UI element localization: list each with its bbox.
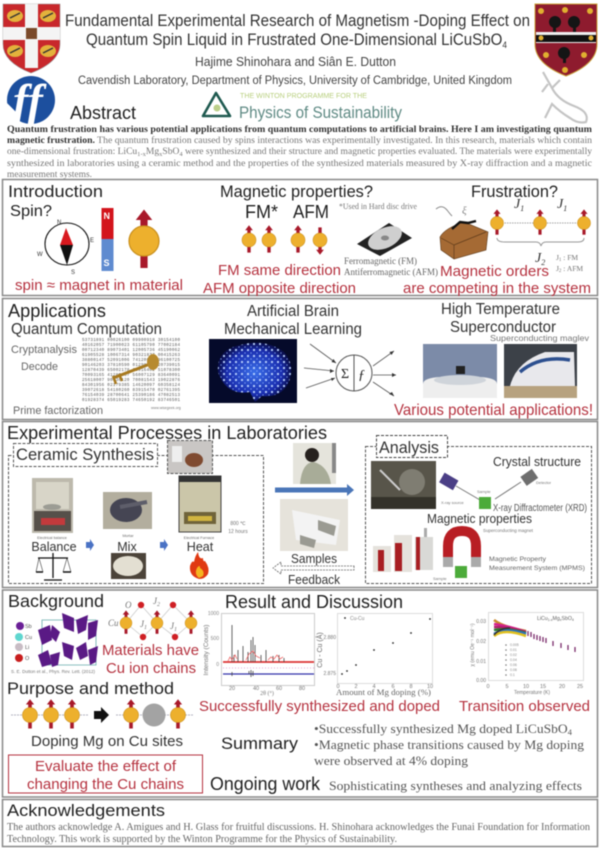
heading: experimental processes: Experimental Processes in Laboratories <box>7 423 327 443</box>
heading: background: Background <box>8 591 104 611</box>
panel: acknowledgements <box>2 800 598 846</box>
note: hard disc: *Used in Hard disc drive <box>339 202 417 211</box>
chart: susceptibility: 0.02 <box>510 653 517 657</box>
icon: frustrated chain: : AFM <box>561 264 583 273</box>
acknowledgements text: Technology. This work is supported by the Winton Programme for the Physics of Sustainability. <box>7 834 397 845</box>
label: maglev: Superconducting maglev <box>490 333 590 343</box>
chart: XRD pattern: 500 <box>211 636 219 642</box>
diagram: Cu chain: J <box>140 619 144 629</box>
label: ceramic synthesis: Ceramic Synthesis <box>16 446 154 464</box>
chart: XRD pattern: 40 <box>253 686 259 692</box>
label: prime factorization: Prime factorization <box>13 405 103 417</box>
image: researcher <box>293 443 336 484</box>
chart: Cu-Cu distance: 8 <box>409 684 413 690</box>
diagram: Cu chain <box>108 596 197 640</box>
label: MPMS: Magnetic Property <box>489 556 547 563</box>
label: AFM: AFM <box>293 202 329 222</box>
image: lab glassware <box>168 440 212 474</box>
legend: FM and AFM: Ferromagnetic (FM) <box>344 256 417 267</box>
abstract text: one-dimensional frustration: LiCu <box>7 147 137 157</box>
heading: summary: Summary <box>221 734 299 753</box>
image: MPMS machine <box>373 528 433 572</box>
chart: susceptibility: 10 <box>523 684 529 690</box>
heading: acknowledgements: Acknowledgements <box>7 801 165 820</box>
note: furnace conditions: 12 hours <box>228 529 248 535</box>
image: number grid with key: www.wisegeek.org <box>151 406 181 410</box>
icon: frustrated chain: J <box>556 264 559 273</box>
label: samples: Samples <box>291 552 337 566</box>
icon: frustrated chain: 1 <box>559 258 562 263</box>
chart: Cu-Cu distance: 6 <box>391 684 395 690</box>
chart: susceptibility: Temperature (K) <box>514 690 550 696</box>
chart: Cu-Cu distance: 2 <box>354 684 358 690</box>
chart: Cu-Cu distance: Cu - Cu (Å) <box>315 632 324 668</box>
caption: AFM: AFM opposite direction <box>203 281 356 297</box>
icon: frustrated chain: J <box>535 251 541 266</box>
diagram: Cu chain: J <box>153 596 157 606</box>
abstract text: were synthesized and their structure and magnetic properties evaluated. The materials were experimentally <box>183 147 592 157</box>
chart: susceptibility: x <box>560 618 562 622</box>
image: number grid with key: 40162057 71900023 61105790 77002184 <box>82 344 180 348</box>
caption: magnetic orders: Magnetic orders <box>440 264 549 280</box>
heading: ongoing work: Ongoing work <box>210 773 321 794</box>
icon: scales <box>36 553 71 580</box>
icon: horseshoe magnet: Sample <box>433 576 447 581</box>
callout: evaluate: Evaluate the effect of <box>35 759 177 775</box>
chart: susceptibility: 0.005 <box>510 643 519 647</box>
image: samples <box>280 499 348 551</box>
icon: horseshoe magnet <box>433 528 534 581</box>
heading: mechanical learning: Mechanical Learning <box>224 321 362 338</box>
chart: susceptibility: Mg <box>553 616 560 622</box>
image: number grid with key <box>82 339 181 410</box>
chart: susceptibility: 0.03 <box>476 619 486 625</box>
abstract text: synthesized in laboratories using a ceramic method and the properties of the synthesized materials measured by X-ray diffraction and a magnetic <box>7 158 592 169</box>
affiliation: Cavendish Laboratory, Department of Physics, University of Cambridge, United Kingdom <box>78 75 512 87</box>
chart: susceptibility: 1-x <box>548 618 553 622</box>
chart: susceptibility: 0.08 <box>510 668 517 672</box>
chart: susceptibility: 25 <box>577 684 583 690</box>
image: mixed powder <box>111 553 146 579</box>
chart: susceptibility: 4 <box>572 618 574 622</box>
image: number grid with key: 39072618 54180260 83915470 02761395 <box>82 389 180 393</box>
icon: FM spins <box>242 225 276 253</box>
chart: susceptibility: χ (emu Oe⁻¹ mol⁻¹) <box>470 623 476 667</box>
caption: Cu ion chains: Cu ion chains <box>106 660 196 677</box>
icon: frustrated chain: J <box>514 197 520 212</box>
subheading: quantum computation: Quantum Computation <box>11 321 162 338</box>
diagram: Cu chain: 1 <box>144 625 147 631</box>
heading: result and discussion: Result and Discussion <box>225 592 403 612</box>
chart: susceptibility: 0.06 <box>510 663 517 667</box>
citation: S. E. Dutton et al., Phys. Rev. Lett. (2012) <box>11 669 95 674</box>
logo: Winton programme <box>203 93 402 122</box>
image: neural brain <box>209 339 297 403</box>
panel: experimental processes <box>2 422 598 588</box>
label: MPMS <box>489 556 585 572</box>
chart: Cu-Cu distance: 2.875 <box>323 671 336 677</box>
diagram: neuron: ƒ <box>358 368 365 383</box>
arrow: balance to mix <box>86 539 94 551</box>
icon: AFM spins <box>291 225 327 255</box>
arrow: feedback <box>273 562 354 574</box>
abstract text <box>7 125 592 180</box>
summary text: •Successfully synthesized Mg doped LiCuSbO <box>314 722 548 736</box>
chart: XRD pattern: 0 <box>216 662 219 668</box>
icon: desk with cat: ξ <box>462 205 467 217</box>
heading: superconductor: Superconductor <box>450 319 556 336</box>
icon: frustrated chain: 1 <box>563 204 567 213</box>
icon: frustrated chain: 2 <box>541 258 545 267</box>
chart: susceptibility: 0.02 <box>476 639 486 645</box>
note: furnace conditions <box>228 521 248 535</box>
abstract text: 1-x <box>137 151 147 158</box>
title: Fundamental Experimental Research of Magnetism -Doping Effect on <box>65 12 530 30</box>
label: decode: Decode <box>21 361 58 373</box>
legend: atoms: Cu <box>25 635 32 641</box>
chart: susceptibility <box>470 612 584 696</box>
legend: atoms: Li <box>25 645 29 651</box>
icon: frustrated chain: 1 <box>520 204 524 213</box>
callout: evaluate: changing the Cu chains <box>27 777 184 793</box>
caption: transition observed: Transition observed <box>459 699 590 715</box>
label: cryptanalysis: Cryptanalysis <box>11 344 77 356</box>
icon: frustrated chain: J <box>556 253 559 262</box>
icon: compass: E <box>90 238 94 244</box>
chart: susceptibility: 0.00 <box>476 678 486 684</box>
heading: crystal structure: Crystal structure <box>493 455 581 469</box>
diagram: neuron: Σ <box>341 367 349 382</box>
abstract text: measurement systems. <box>7 170 92 180</box>
icon: compass: N <box>57 220 61 226</box>
summary text: were observed at 4% doping <box>314 754 469 768</box>
abstract text: SbO <box>162 147 179 157</box>
caption: materials have: Materials have <box>102 642 199 659</box>
icon: horseshoe magnet: Superconducting magnet <box>483 528 534 533</box>
icon: compass: S <box>71 270 75 276</box>
title: 4 <box>502 40 507 50</box>
caption: spin magnet: spin ≈ magnet in material <box>15 277 183 294</box>
chart: XRD pattern: Intensity (Counts) <box>203 625 210 675</box>
chart: susceptibility: 5 <box>505 684 509 690</box>
diagram: Cu chain: O <box>125 600 132 610</box>
summary text <box>314 722 585 768</box>
chart: Cu-Cu distance: 10 <box>427 684 433 690</box>
logo: Cambridge shield <box>3 4 60 73</box>
chart: Cu-Cu distance: Cu-Cu <box>350 616 365 622</box>
subheading: spin: Spin? <box>10 203 52 220</box>
icon: compass: W <box>37 252 43 258</box>
arrow: mix to heat <box>160 539 168 551</box>
label: FM: FM* <box>245 202 278 222</box>
legend: FM and AFM <box>344 256 438 278</box>
diagram: Cu chain: J <box>170 621 174 631</box>
chart: XRD pattern: 2θ (°) <box>260 690 274 697</box>
image: number grid with key: 25618007 90436120 70081543 19022876 <box>82 379 180 383</box>
image: number grid with key: 53731891 00026100 09900918 30154100 <box>82 339 180 343</box>
title <box>65 12 530 50</box>
icon: frustrated chain: : FM <box>561 253 578 262</box>
group: ceramic synthesis <box>8 440 264 584</box>
legend: atoms: Sb <box>25 624 32 630</box>
image: number grid with key: 00712340 89073401 12005736 45190062 <box>82 349 180 353</box>
heading: applications: Applications <box>8 300 106 321</box>
labels: equipment names: Electrical Furnace <box>184 536 214 540</box>
image: electrical balance <box>32 478 73 533</box>
abstract text: Quantum frustration has various potential applications from quantum computations to artificial brains. Here I am investigating quantum <box>7 125 592 135</box>
abstract text: 4 <box>179 151 183 158</box>
heading: purpose and method: Purpose and method <box>7 679 174 698</box>
legend: atoms <box>15 622 32 662</box>
logo: lizard <box>542 72 587 122</box>
abstract text: Mg <box>146 147 159 157</box>
chart: susceptibility: 0.04 <box>510 658 517 662</box>
chart: susceptibility: 20 <box>559 684 565 690</box>
chart: Cu-Cu distance <box>315 614 433 697</box>
heading: magnetic properties: Magnetic properties <box>427 511 532 526</box>
chart: XRD pattern <box>203 611 314 697</box>
image: levitating magnet <box>423 344 497 398</box>
logo: ff <box>7 75 55 126</box>
label: mix: Mix <box>117 540 137 554</box>
image: number grid with key: 84301956 02179385 14620097 60358124 <box>82 384 180 388</box>
caption: competing: are competing in the system <box>403 281 591 297</box>
labels: equipment names <box>37 534 214 540</box>
legend: atoms: O <box>25 656 30 662</box>
chart: XRD pattern: 60 <box>276 686 282 692</box>
heading: frustration: Frustration? <box>471 182 558 201</box>
abstract text: magnetic frustration. The quantum frustration caused by spins interactions was experimentally investigated. In this research, materials which contain <box>7 135 592 146</box>
chart: susceptibility: 0 <box>486 684 490 690</box>
image: number grid with key: 61905528 10067314 90321877 00415263 <box>82 354 180 358</box>
logo: ff: ff <box>13 75 47 126</box>
label: heat: Heat <box>187 540 214 554</box>
heading: magnetic properties: Magnetic properties? <box>220 182 373 201</box>
chart: susceptibility: 0.1 <box>510 673 515 677</box>
diagram: XRD: Detector <box>536 480 552 485</box>
icon: bar magnet: S <box>104 258 110 268</box>
callout: evaluate <box>8 755 202 793</box>
labels: equipment names: Electrical balance <box>37 536 67 540</box>
image: number grid with key: 12870439 65002178 38916402 51078300 <box>82 369 180 373</box>
caption: FM: FM same direction <box>218 263 341 279</box>
summary text: •Magnetic phase transitions caused by Mg doping <box>314 738 585 752</box>
diagram: XRD: Sample <box>477 489 491 494</box>
abstract text: x <box>159 151 163 158</box>
label: MPMS: Measurement System (MPMS) <box>489 565 585 572</box>
icon: flame <box>190 552 209 579</box>
note: furnace conditions: 800 ℃ <box>230 521 246 527</box>
chart: susceptibility: SbO <box>562 616 572 622</box>
panel: results <box>2 590 598 797</box>
image: diffractometer <box>371 461 436 509</box>
diagram: Cu chain: Cu <box>108 618 119 628</box>
icon: frustrated chain <box>490 197 590 274</box>
image: number grid with key: 76154039 28700641 25390186 47082513 <box>82 394 180 398</box>
logo: college shield <box>535 4 597 76</box>
chart: susceptibility: LiCu <box>537 616 548 622</box>
icon: frustrated chain: 2 <box>559 269 562 274</box>
image: number grid with key: 01928374 65019283 74650192 83746501 <box>82 399 180 403</box>
image: number grid with key: 38800147 52091006 74120038 96100725 <box>82 359 180 363</box>
caption: synthesized and doped: Successfully synthesized and doped <box>199 699 440 715</box>
ongoing work text: Sophisticating syntheses and analyzing effects <box>329 779 582 793</box>
label: balance: Balance <box>31 540 77 554</box>
diagram: Cu chain: 1 <box>174 627 177 633</box>
label: feedback: Feedback <box>288 573 341 587</box>
image: electrical furnace <box>179 476 221 532</box>
logo: Winton programme: Physics of Sustainability <box>239 103 402 122</box>
icon: frustrated chain: J <box>557 197 563 212</box>
acknowledgements text: The authors acknowledge A. Amigues and H. Glass for fruitful discussions. H. Shinohara acknowledges the Funai Foundation for Information <box>7 822 590 833</box>
diagram: crystal structure <box>38 613 98 667</box>
abstract heading: Abstract <box>70 103 136 123</box>
icon: desk with cat <box>436 205 488 259</box>
chart: XRD pattern: 20 <box>229 686 235 692</box>
title: Quantum Spin Liquid in Frustrated One-Dimensional LiCuSbO <box>86 31 541 49</box>
chart: Cu-Cu distance: 2.880 <box>323 635 336 641</box>
heading: artificial brain: Artificial Brain <box>247 303 339 320</box>
diagram: XRD <box>439 469 552 509</box>
group: analysis <box>366 436 592 584</box>
heading: introduction: Introduction <box>8 182 103 201</box>
chart: XRD pattern: 1000 <box>208 611 219 617</box>
image: mortar <box>103 492 152 529</box>
icon: compass <box>37 220 94 276</box>
caption: doping: Doping Mg on Cu sites <box>31 733 183 750</box>
chart: susceptibility: 15 <box>540 684 546 690</box>
chart: XRD pattern: 80 <box>299 686 305 692</box>
label: analysis: Analysis <box>379 438 439 457</box>
logo: Winton programme: THE WINTON PROGRAMME FOR THE <box>240 93 367 100</box>
heading: high temperature: High Temperature <box>441 301 560 318</box>
icon: bar magnet <box>102 208 114 271</box>
arrow: to analysis <box>275 484 354 496</box>
acknowledgements text <box>7 822 590 845</box>
panel: applications <box>2 298 598 420</box>
icon: hard disc drive <box>357 221 412 256</box>
icon: bar magnet: N <box>104 211 110 221</box>
legend: FM and AFM: Antiferromagnetic (AFM) <box>344 267 438 278</box>
diagram: doping <box>11 699 194 728</box>
icon: large spin <box>129 210 159 268</box>
labels: equipment names: Mortar <box>123 534 134 538</box>
image: number grid with key: 70093165 41280367 56007129 83640091 <box>82 374 180 378</box>
header <box>3 4 597 180</box>
diagram: XRD: X-ray source <box>441 500 464 505</box>
diagram: Cu chain: 2 <box>157 602 160 608</box>
caption: various applications: Various potential applications! <box>394 402 593 419</box>
chart: Cu-Cu distance: 4 <box>372 684 376 690</box>
summary text: 4 <box>568 728 572 737</box>
panel: introduction <box>2 180 598 297</box>
chart: susceptibility: 0.01 <box>510 648 517 652</box>
chart: Cu-Cu distance: 0 <box>336 684 340 690</box>
image: maglev train <box>504 344 577 398</box>
image: number grid with key: 90146203 37810590 01298466 20739015 <box>82 364 180 368</box>
chart: Cu-Cu distance: Amount of Mg doping (%) <box>336 688 431 697</box>
authors: Hajime Shinohara and Siân E. Dutton <box>195 55 396 69</box>
chart: susceptibility: 0.01 <box>476 659 486 665</box>
diagram: neuron <box>304 344 396 396</box>
